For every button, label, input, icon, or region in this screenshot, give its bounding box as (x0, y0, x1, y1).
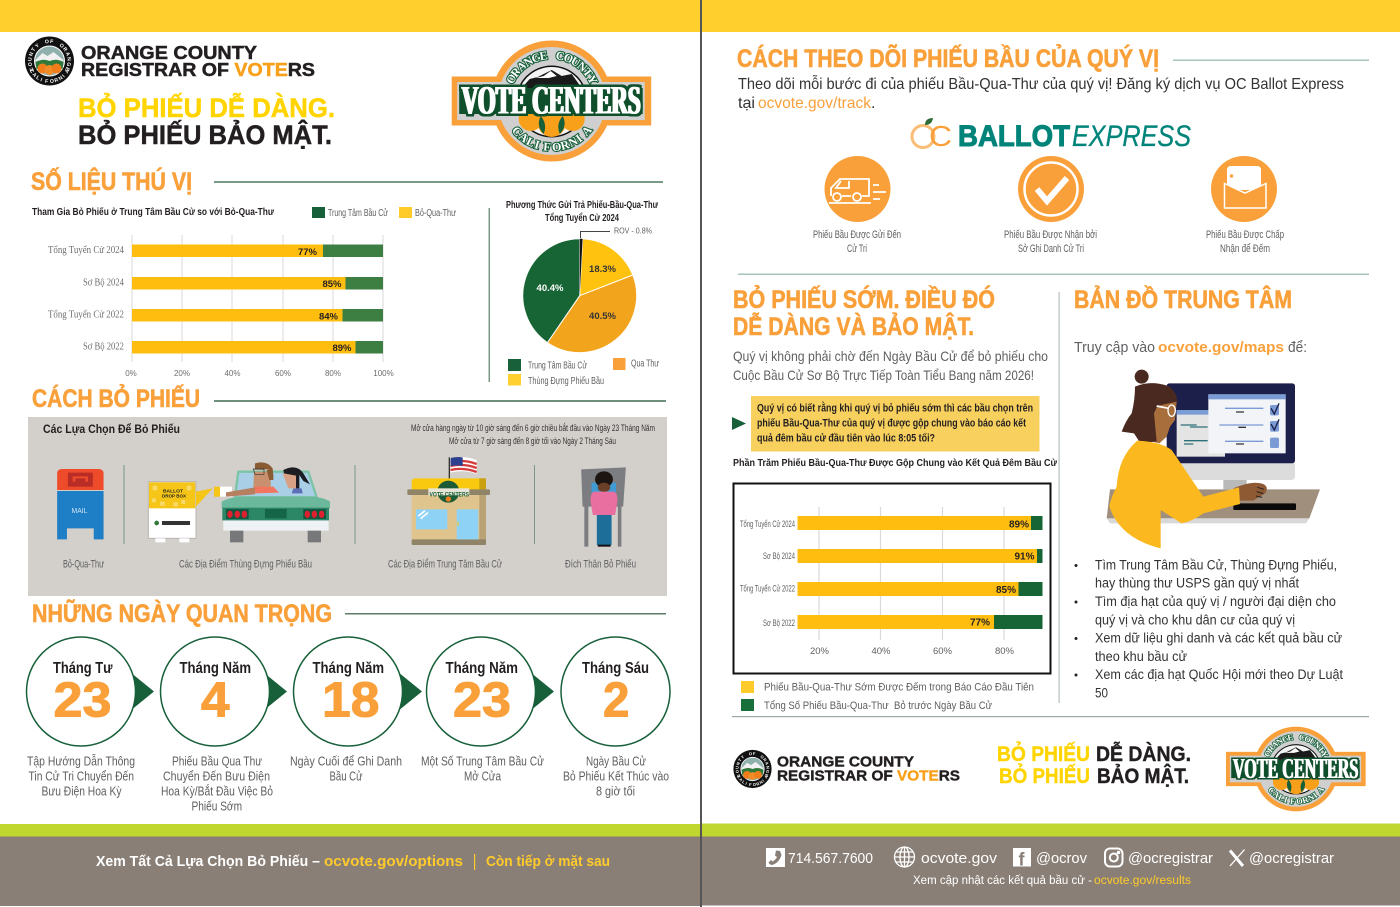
maps link text (1074, 340, 1307, 356)
maps link text: để: (1288, 340, 1307, 356)
vote centers logo: ORANGE COUNTY (503, 48, 601, 87)
icon: facebook: f (1018, 850, 1026, 870)
top yellow band (702, 0, 1400, 32)
date: May 23: Một Số Trung Tâm Bầu Cử (421, 754, 544, 768)
panel: voting options (28, 417, 667, 596)
option labels: Các Địa Điểm Thùng Đựng Phiếu Bầu (179, 558, 312, 570)
opening hours: Mở cửa hàng ngày từ 10 giờ sáng đến 6 giờ chiều bắt đầu vào Ngày 23 Tháng Năm (411, 423, 655, 434)
bullet list: Xem các địa hạt Quốc Hội mới theo Dự Luật (1095, 667, 1343, 682)
stacked bar chart: early mail ballots: Tổng Tuyển Cử 2022 (740, 584, 795, 594)
icon: phone (766, 848, 785, 867)
slogan small: DỄ DÀNG. (1096, 743, 1191, 766)
date: June 2: 2 (603, 674, 630, 728)
section: track your ballot (737, 43, 1369, 275)
slogan: BỎ PHIẾU BẢO MẬT. (78, 118, 332, 150)
bullet list (1074, 558, 1343, 700)
stacked bar chart: vote center vs mail: 85% (322, 279, 342, 290)
pie chart: ballot return method: Phương Thức Gửi Trả Phiếu-Bầu-Qua-Thư (506, 199, 658, 211)
step: ballot received (1004, 156, 1097, 255)
stacked bar chart: vote center vs mail: 84% (319, 312, 339, 322)
chart legend (741, 681, 1034, 712)
date: May 18: 18 (322, 674, 380, 728)
stacked bar chart: early mail ballots: 85% (996, 585, 1016, 596)
date: June 2: Ngày Bầu Cử (586, 754, 646, 768)
icon: vote center building (407, 457, 490, 545)
stacked bar chart: vote center vs mail: Sơ Bộ 2024 (83, 278, 124, 288)
county seal small (733, 750, 772, 788)
date: June 2 (563, 660, 669, 798)
heading (733, 284, 995, 341)
chart legend (312, 207, 456, 219)
opening hours: Mở cửa từ 7 giờ sáng đến 8 giờ tối vào Ngày 2 Tháng Sáu (449, 436, 616, 447)
facebook handle: @ocrov (1036, 851, 1088, 867)
icon: X (1230, 850, 1244, 866)
slogan small: BỎ PHIẾU (997, 742, 1090, 766)
slogan: BỎ PHIẾU DỄ DÀNG. (78, 91, 335, 123)
chart legend: Phiếu Bầu-Qua-Thư Sớm Được Đếm trong Báo Cáo Đầu Tiên (764, 682, 1034, 694)
logo: OC Ballot Express: EXPRESS (1072, 120, 1191, 153)
chart legend: Tổng Số Phiếu Bầu-Qua-Thư Bỏ trước Ngày Bầu Cử (764, 700, 993, 712)
results note: Xem cập nhật các kết quả bầu cử - (913, 875, 1092, 887)
stacked bar chart: vote center vs mail: Tổng Tuyển Cử 2022 (48, 310, 124, 320)
stacked bar chart: vote center vs mail: 80% (325, 369, 341, 378)
stacked bar chart: early mail ballots (734, 484, 1050, 674)
date: May 4 (161, 660, 273, 814)
instagram handle: @ocregistrar (1128, 851, 1213, 867)
agency name small: REGISTRAR OF VOTERS (777, 768, 960, 784)
tracking text: tại (738, 95, 755, 112)
pie chart: ballot return method: Trung Tâm Bầu Cử (528, 360, 587, 372)
slogan small: BỎ PHIẾU (999, 764, 1090, 788)
county seal small: COUNTY OF ORANGE (734, 751, 771, 778)
icon: in-person voter at booth (581, 467, 626, 547)
results note: ocvote.gov/results (1094, 875, 1191, 887)
county seal: COUNTY OF ORANGE (27, 39, 72, 72)
arrow (732, 417, 746, 430)
bullet list: theo khu bầu cử (1095, 649, 1187, 664)
centre divider (700, 0, 702, 907)
chart legend: Bỏ-Qua-Thư (415, 207, 456, 219)
slogan small: BẢO MẬT. (1097, 764, 1189, 788)
section heading: how to vote: CÁCH BỎ PHIẾU (32, 383, 200, 413)
icon: ballot drop box and car: DROP BOX (162, 494, 187, 500)
county seal small: CALIFORNIA (736, 774, 769, 787)
date: May 23: Tháng Năm (446, 660, 518, 677)
date: May 4: Tháng Năm (180, 660, 251, 677)
chart title: Phần Trăm Phiếu Bầu-Qua-Thư Được Gộp Chung vào Kết Quả Đêm Bầu Cử (733, 457, 1058, 469)
tracking text: ocvote.gov/track (758, 95, 872, 112)
footer: front page: Còn tiếp ở mặt sau (486, 853, 610, 870)
icon: ballot drop box and car: BALLOT (163, 488, 183, 494)
stacked bar chart: vote center vs mail: Sơ Bộ 2022 (83, 342, 124, 352)
callout: phiếu Bầu-Qua-Thư của quý vị được gộp chung vào báo cáo kết (757, 418, 1026, 430)
date: April 23: Bưu Điện Hoa Kỳ (42, 784, 122, 798)
step: ballot mailed: Cử Tri (847, 243, 867, 255)
date: May 18 (290, 660, 402, 784)
pie chart: ballot return method (488, 199, 659, 387)
step: ballot received: Phiếu Bầu Được Nhận bởi (1004, 229, 1097, 241)
logo: OC Ballot Express: BALLOT (958, 120, 1070, 153)
option labels: Bỏ-Qua-Thư (63, 558, 104, 570)
date: April 23: 23 (54, 674, 112, 728)
step: ballot accepted (1206, 156, 1284, 255)
county seal (25, 36, 74, 86)
stacked bar chart: vote center vs mail: 100% (373, 369, 394, 378)
date: May 4: Phiếu Sớm (192, 800, 242, 814)
stacked bar chart: vote center vs mail: 20% (174, 369, 190, 378)
pie chart: ballot return method: 18.3% (589, 264, 617, 275)
tracking text: Theo dõi mỗi bước đi của phiếu Bầu-Qua-Thư của quý vị! Đăng ký dịch vụ OC Ballot Express (738, 74, 1344, 93)
paragraph: Quý vị không phải chờ đến Ngày Bầu Cử để bỏ phiếu cho (733, 348, 1048, 364)
maps link text: Truy cập vào (1074, 340, 1155, 356)
agency name small (777, 754, 960, 784)
pie chart: ballot return method: ROV - 0.8% (614, 226, 652, 236)
vote centers logo: CALIFORNIA (509, 123, 595, 154)
county seal: CALIFORNIA (28, 68, 71, 85)
step: ballot mailed: Phiếu Bầu Được Gửi Đến (813, 229, 901, 241)
logo: OC Ballot Express: C (929, 121, 952, 153)
stacked bar chart: vote center vs mail: 0% (125, 369, 137, 378)
date: June 2: Bỏ Phiếu Kết Thúc vào (563, 770, 669, 784)
date: June 2: Tháng Sáu (582, 660, 649, 677)
panel: back page (702, 0, 1400, 906)
date: May 4: Phiếu Bầu Qua Thư (172, 754, 262, 768)
website: ocvote.gov (921, 851, 998, 867)
slogan (78, 91, 335, 150)
icon: instagram (1105, 848, 1122, 866)
step: ballot received: Sở Ghi Danh Cử Tri (1018, 243, 1084, 255)
stacked bar chart: early mail ballots: Sơ Bộ 2024 (763, 551, 795, 562)
bullet list: 50 (1095, 686, 1108, 700)
heading: BẢN ĐỒ TRUNG TÂM (1074, 284, 1292, 314)
date: April 23: Tập Hướng Dẫn Thông (27, 754, 135, 768)
footer: back page (702, 824, 1400, 906)
agency name small: ORANGE COUNTY (777, 754, 914, 770)
callout (751, 396, 1040, 452)
pie chart: ballot return method: Qua Thư (631, 358, 659, 370)
vote centers logo: VOTE CENTERS (462, 78, 641, 122)
option labels (63, 558, 636, 570)
footer: front page (0, 824, 700, 906)
logo: OC Ballot Express (912, 118, 1191, 153)
stacked bar chart: vote center vs mail: Tổng Tuyển Cử 2024 (48, 245, 124, 256)
phone number: 714.567.7600 (788, 851, 873, 867)
pie chart: ballot return method: 40.5% (589, 311, 617, 322)
stacked bar chart: vote center vs mail: 77% (298, 247, 318, 258)
date: May 18: Ngày Cuối để Ghi Danh (290, 754, 402, 768)
bullet list: Tìm Trung Tâm Bầu Cử, Thùng Đựng Phiếu, (1095, 558, 1337, 572)
section heading: important dates: NHỮNG NGÀY QUAN TRỌNG (32, 598, 332, 628)
date: June 2: 8 giờ tối (596, 784, 635, 798)
date: May 4: Hoa Kỳ/Bắt Đầu Việc Bỏ (161, 784, 273, 798)
tracking text: . (871, 95, 875, 112)
vote centers logo small: CALIFORNIA (1266, 785, 1326, 806)
callout: quả đêm bầu cử đầu tiên vào lúc 8:05 tối? (757, 432, 935, 444)
vote centers logo small: ORANGE COUNTY (1263, 733, 1330, 759)
icon: facebook (1013, 848, 1031, 870)
step: ballot mailed (813, 156, 901, 255)
stacked bar chart: early mail ballots: 40% (871, 646, 891, 657)
paragraph: Cuộc Bầu Cử Sơ Bộ Trực Tiếp Toàn Tiểu Bang năm 2026! (733, 367, 1034, 383)
date: May 18: Bầu Cử (330, 770, 362, 784)
illustration: person at computer (1107, 370, 1320, 548)
date: April 23: Tháng Tư (53, 660, 113, 677)
pie chart: ballot return method: 40.4% (537, 283, 564, 294)
date: May 23: 23 (453, 674, 511, 728)
panel: front page (0, 0, 700, 906)
X handle: @ocregistrar (1249, 851, 1334, 867)
date: May 23 (421, 660, 544, 784)
date: May 23: Mở Cửa (464, 770, 501, 784)
chart title: Tham Gia Bỏ Phiếu ở Trung Tâm Bầu Cử so với Bỏ-Qua-Thư (32, 206, 274, 218)
agency name: REGISTRAR OF VOTERS (81, 59, 315, 80)
date: May 18: Tháng Năm (312, 660, 384, 677)
icon: globe (894, 847, 914, 867)
stacked bar chart: early mail ballots: 60% (933, 646, 953, 657)
stacked bar chart: early mail ballots: Tổng Tuyển Cử 2024 (740, 519, 795, 530)
maps link text: ocvote.gov/maps (1158, 340, 1284, 356)
section: vote center maps (1074, 284, 1343, 700)
agency name (81, 42, 315, 80)
icon: mailbox: MAIL (72, 508, 88, 515)
stacked bar chart: vote center vs mail: 89% (332, 343, 352, 354)
pie chart: ballot return method: Tổng Tuyển Cử 2024 (545, 212, 619, 224)
heading: DỄ DÀNG VÀ BẢO MẬT. (733, 311, 974, 341)
stacked bar chart: early mail ballots: 89% (1009, 520, 1029, 530)
footer: front page: ocvote.gov/options (324, 853, 463, 870)
bullet list: quý vị và cho khu dân cư của quý vị (1095, 612, 1295, 628)
option labels: Các Địa Điểm Trung Tâm Bầu Cử (388, 558, 502, 570)
icon: mailbox (57, 469, 104, 539)
stacked bar chart: early mail ballots: Sơ Bộ 2022 (763, 618, 795, 629)
stacked bar chart: early mail ballots: 80% (995, 646, 1015, 657)
option labels: Đích Thân Bỏ Phiếu (565, 558, 636, 570)
vote centers logo small (1226, 727, 1366, 811)
bullet list: Xem dữ liệu ghi danh và các kết quả bầu cử (1095, 630, 1342, 646)
stacked bar chart: early mail ballots: 91% (1014, 552, 1035, 562)
date: April 23: Tin Cử Tri Chuyển Đến (28, 770, 134, 784)
stacked bar chart: early mail ballots: 20% (810, 646, 830, 657)
tracking text (738, 74, 1344, 112)
stacked bar chart: vote center vs mail: 40% (224, 369, 241, 378)
stacked bar chart: early mail ballots: 77% (970, 618, 990, 628)
bullet list: hay thùng thư USPS gần quý vị nhất (1095, 576, 1299, 590)
date: May 4: 4 (201, 674, 230, 728)
date: April 23 (27, 660, 135, 798)
icon: vote center building: VOTE CENTERS (430, 492, 470, 498)
icon: ballot drop box and car (148, 462, 330, 542)
vote centers logo (452, 40, 651, 162)
section heading: fun facts: SỐ LIỆU THÚ VỊ (31, 166, 192, 196)
step: ballot accepted: Phiếu Bầu Được Chấp (1206, 229, 1284, 241)
date: May 4: Chuyển Đến Bưu Điện (163, 770, 270, 784)
options heading: Các Lựa Chọn Để Bỏ Phiếu (43, 424, 180, 436)
step: ballot accepted: Nhận để Đếm (1220, 243, 1270, 255)
stacked bar chart: vote center vs mail: 60% (275, 369, 291, 378)
chart legend: Trung Tâm Bầu Cử (328, 207, 388, 219)
section: vote early (732, 284, 1058, 712)
timeline of dates (26, 637, 670, 814)
callout: Quý vị có biết rằng khi quý vị bỏ phiếu sớm thì các bầu chọn trên (757, 402, 1033, 414)
pie chart: ballot return method: Thùng Đựng Phiếu Bầu (528, 375, 604, 387)
stacked bar chart: vote center vs mail (32, 206, 456, 378)
bullet list: Tìm địa hạt của quý vị / người đại diện cho (1095, 594, 1336, 609)
results note (913, 875, 1191, 887)
agency name: ORANGE COUNTY (81, 42, 258, 63)
footer: front page: Xem Tất Cả Lựa Chọn Bỏ Phiếu – (96, 853, 320, 870)
top yellow band (0, 0, 700, 32)
opening hours (411, 423, 655, 447)
paragraph (733, 348, 1048, 383)
slogan small (997, 742, 1191, 788)
heading: BỎ PHIẾU SỚM. ĐIỀU ĐÓ (733, 284, 995, 314)
heading: CÁCH THEO DÕI PHIẾU BẦU CỦA QUÝ VỊ (737, 43, 1159, 73)
